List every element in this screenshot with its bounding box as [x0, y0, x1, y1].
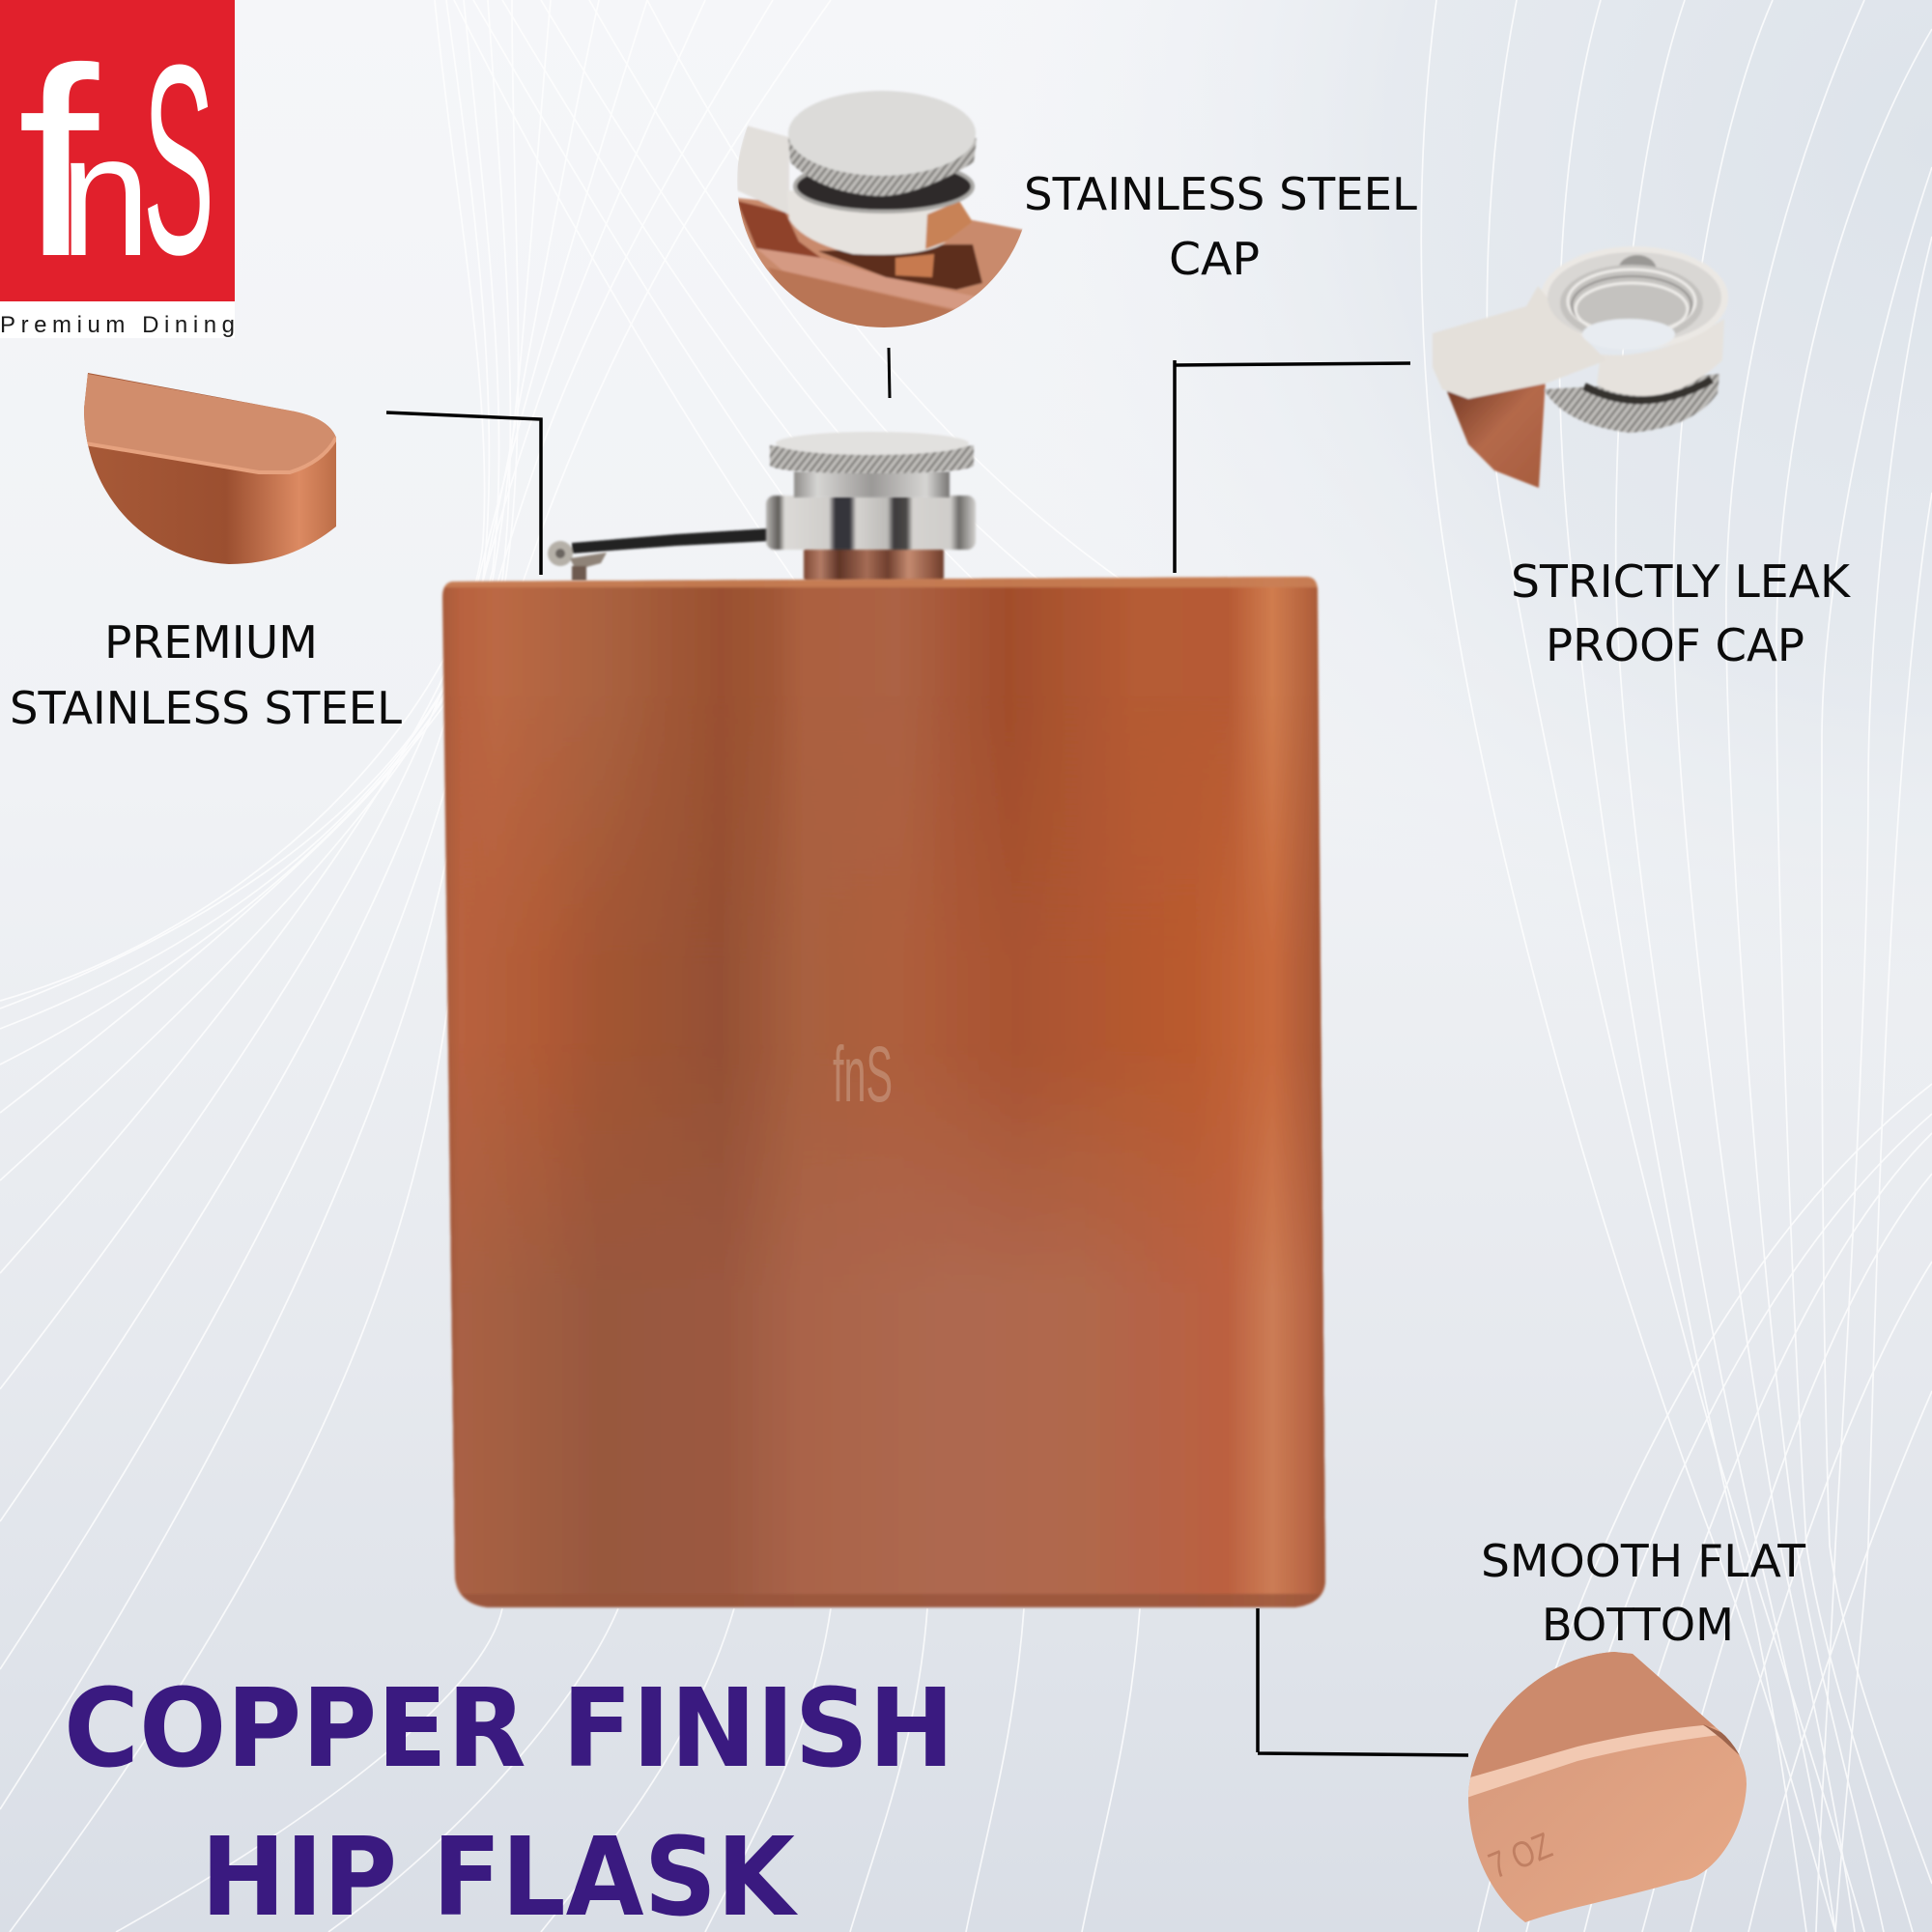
callout: strictly leak proof cap: [1175, 246, 1852, 671]
flask cap top: [770, 432, 974, 473]
flask: [425, 432, 1343, 1623]
logo: n: [60, 99, 151, 293]
logo: Premium Dining: [0, 312, 235, 338]
detail image: copper corner: [84, 373, 336, 564]
label: STRICTLY LEAK: [1511, 555, 1852, 608]
callout: stainless steel cap: [737, 91, 1417, 398]
flask arm and hinge: [548, 528, 770, 581]
logo: [0, 0, 235, 338]
label: STAINLESS STEEL: [1024, 168, 1417, 220]
connector line: [1175, 360, 1410, 573]
callout: premium stainless steel: [10, 367, 541, 734]
flask cap collar: [766, 496, 976, 550]
flask engraved logo: fnS: [833, 1031, 893, 1119]
flask cap inner neck: [794, 471, 950, 497]
callout: premium stainless steel: STAINLESS STEEL: [10, 682, 402, 734]
base engraving: 7 OZ: [1484, 1826, 1558, 1887]
detail image: flask base: [1468, 1652, 1747, 1922]
detail image: open cap: [1433, 246, 1728, 488]
label: SMOOTH FLAT: [1481, 1535, 1806, 1587]
flask body: [425, 570, 1343, 1623]
connector line: [1258, 1608, 1468, 1755]
title: [64, 1666, 954, 1932]
callout: smooth flat bottom: BOTTOM: [1542, 1599, 1734, 1651]
connector line: [386, 412, 541, 575]
detail image: closed cap: [737, 91, 1034, 333]
connector line: [889, 348, 890, 398]
logo: f: [17, 12, 99, 312]
callout: smooth flat bottom: [1258, 1535, 1806, 1932]
callout: stainless steel cap: CAP: [1169, 233, 1260, 285]
logo: S: [143, 10, 214, 311]
label: PREMIUM: [104, 616, 318, 668]
callout: strictly leak proof cap: PROOF CAP: [1546, 619, 1804, 671]
flask neck: [804, 547, 944, 582]
title: COPPER FINISH: [64, 1666, 954, 1792]
